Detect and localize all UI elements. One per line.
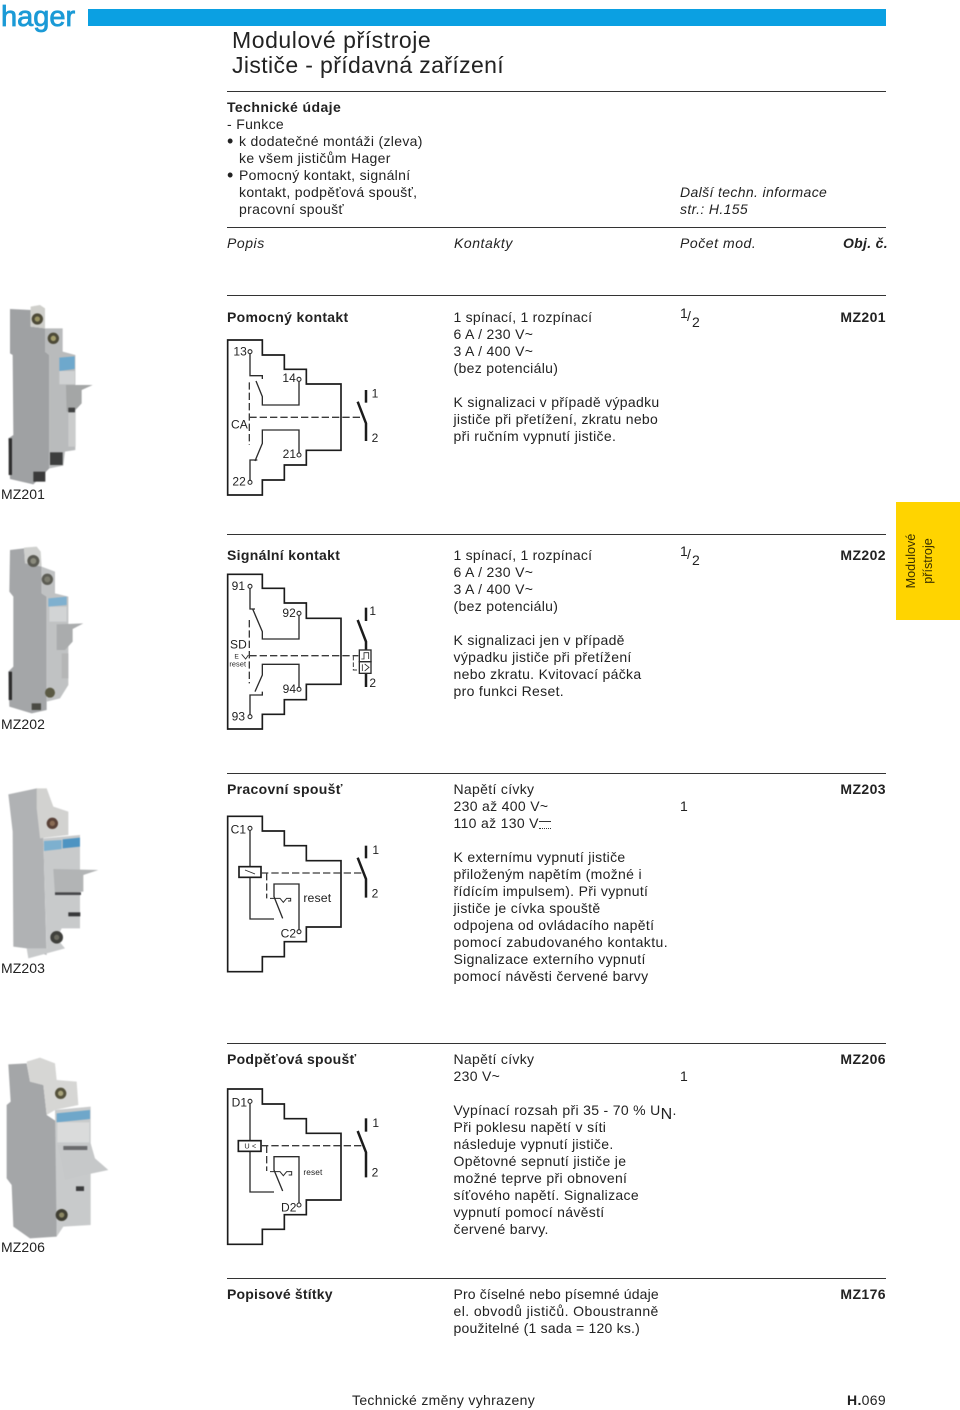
description: MZ206: síťového napětí. Signalizace [454,1187,639,1203]
photo: MZ202 device [8,546,83,714]
description: MZ202 [454,547,642,699]
heading: Podpěťová spoušť: Podpěťová spoušť [227,1051,356,1067]
heading: Popisové štítky: Popisové štítky [227,1286,333,1302]
panel: MZ202 [1,534,886,732]
description: MZ206: Vypínací rozsah při 35 - 70 % UN. [454,1102,677,1123]
description: MZ201 [453,309,660,444]
caption: MZ203: MZ203 [1,960,45,976]
description: MZ202: výpadku jističe při přetížení [454,649,632,665]
circuit diagram: MZ202: 1 [369,604,376,618]
heading: Signální kontakt: Signální kontakt [227,547,340,563]
circuit diagram: MZ201: 22 [232,475,246,489]
description: MZ202: (bez potenciálu) [454,598,558,614]
technical data text block [227,99,423,217]
description: MZ206: následuje vypnutí jističe. [454,1136,614,1152]
table header row: Počet mod. [680,235,756,251]
circuit diagram: MZ201 [226,339,379,496]
circuit diagram: MZ206: D2 [281,1200,297,1214]
circuit diagram: MZ202: 2 [369,676,376,690]
further information note: Další techn. informace [680,184,827,200]
technical data text block: pracovní spoušť [239,201,344,217]
circuit diagram: MZ206 [226,1088,379,1246]
modules count: 1/2: 1 [680,543,688,559]
table header row [227,235,888,251]
circuit diagram: MZ202: SD [230,638,247,652]
modules count: 1/2: 2 [692,314,700,330]
description: MZ203: pomocí zabudovaného kontaktu. [454,934,668,950]
description: MZ206: 230 V~ [454,1068,500,1084]
description: MZ202: K signalizaci jen v případě [454,632,625,648]
technical data text block: • [227,165,233,185]
description: MZ201: při ručním vypnutí jističe. [454,428,616,444]
description: MZ203: 230 až 400 V~ [454,798,548,814]
table header row: Popis [227,235,265,251]
description: MZ202: nebo zkratu. Kvitovací páčka [454,666,641,682]
modules count: 1/2: 1 [680,305,688,321]
circuit diagram: MZ202: reset [229,660,246,669]
description: MZ203: odpojena od ovládacího napětí [454,917,654,933]
modules count: 1/2: / [687,308,691,324]
description: MZ203: K externímu vypnutí jističe [454,849,626,865]
modules count: 1: 1 [680,798,688,814]
technical data text block: Pomocný kontakt, signální [239,167,410,183]
description: MZ203: pomocí návěsti červené barvy [454,968,648,984]
title: Modulové přístroje [232,27,431,53]
description: MZ202: 3 A / 400 V~ [454,581,533,597]
modules count: 1: 1 [680,1068,688,1084]
description: MZ203: přiloženým napětím (možné i [454,866,642,882]
heading: Pomocný kontakt: Pomocný kontakt [227,309,348,325]
modules count: 1/2: / [687,546,691,562]
circuit diagram: MZ206: 1 [372,1116,379,1130]
circuit diagram: MZ203: C2 [281,927,296,941]
description: MZ201: (bez potenciálu) [454,360,558,376]
description: MZ176: el. obvodů jističů. Oboustranně [454,1303,659,1319]
circuit diagram: MZ202: 94 [283,682,296,696]
photo: MZ201 device [8,304,92,485]
circuit diagram: MZ202: 91 [232,579,245,593]
photo: MZ203 device [8,788,98,958]
circuit diagram: MZ203: reset [303,891,332,905]
description: MZ201: 6 A / 230 V~ [454,326,533,342]
technical data text block: ke všem jističům Hager [239,150,391,166]
description: MZ202: 1 spínací, 1 rozpínací [454,547,592,563]
photo: MZ206 device [6,1058,108,1239]
technical data text block: kontakt, podpěťová spoušť, [239,184,417,200]
circuit diagram: MZ202: 93 [232,710,245,724]
order code: MZ206: MZ206 [840,1051,886,1067]
side tab: Modulové přístroje: přístroje [921,538,935,584]
circuit diagram: MZ202 [226,574,376,730]
circuit diagram: MZ203 [226,816,379,972]
description: MZ176 [454,1286,659,1336]
description: MZ206: červené barvy. [454,1221,549,1237]
circuit diagram: MZ201: 1 [372,386,379,400]
circuit diagram: MZ201: CA [231,417,248,431]
circuit diagram: MZ203: 1 [372,843,379,857]
panel: MZ201 [1,295,886,502]
circuit diagram: MZ202: E [234,654,239,661]
description: MZ203: jističe je cívka spouště [454,900,600,916]
description: MZ203 [453,781,668,984]
circuit diagram: MZ201: 13 [233,344,247,358]
logo: hager: hager [1,1,75,33]
modules count: 1/2: 2 [692,552,700,568]
circuit diagram: MZ203: 2 [372,886,379,900]
panel: MZ176 [227,1278,886,1336]
description: MZ203: řídícím impulsem). Při vypnutí [454,883,648,899]
further information note [680,184,827,217]
order code: MZ201: MZ201 [840,309,886,325]
order code: MZ176: MZ176 [840,1286,886,1302]
table header row: Kontakty [454,235,513,251]
circuit diagram: MZ203: C1 [231,822,246,836]
description: MZ201: 3 A / 400 V~ [454,343,533,359]
description: MZ203: Signalizace externího vypnutí [454,951,646,967]
description: MZ203: Napětí cívky [454,781,534,797]
technical data text block: - Funkce [227,116,284,132]
technical data text block: k dodatečné montáži (zleva) [239,133,423,149]
description: MZ206: Opětovné sepnutí jističe je [454,1153,626,1169]
description: MZ176: použitelné (1 sada = 120 ks.) [454,1320,640,1336]
circuit diagram: MZ202: 92 [282,606,296,620]
title: Jističe - přídavná zařízení [232,52,504,78]
modules count: 1/2 [680,305,700,330]
circuit diagram: MZ206: U < [244,1142,256,1151]
modules count: 1/2 [680,543,700,568]
technical data text block: Technické údaje [227,99,341,115]
circuit diagram: MZ206: reset [303,1167,323,1177]
technical data text block: • [227,131,233,151]
description: MZ201: K signalizaci v případě výpadku [454,394,660,410]
circuit diagram: MZ201: 2 [372,431,379,445]
further information note: str.: H.155 [680,201,748,217]
description: MZ201: 1 spínací, 1 rozpínací [454,309,592,325]
panel: MZ203 [1,773,886,984]
caption: MZ201: MZ201 [1,486,45,502]
description: MZ206: možné teprve při obnovení [454,1170,627,1186]
description: MZ206 [454,1051,677,1237]
description: MZ206: Při poklesu napětí v síti [454,1119,606,1135]
description: MZ202: 6 A / 230 V~ [454,564,533,580]
heading: Pracovní spoušť: Pracovní spoušť [227,781,343,797]
title [232,27,504,78]
circuit diagram: MZ206: 2 [372,1166,379,1180]
table header row: Obj. č. [843,235,888,251]
caption: MZ202: MZ202 [1,716,45,732]
circuit diagram: MZ206: D1 [232,1096,247,1110]
description: MZ206: Napětí cívky [454,1051,534,1067]
circuit diagram: MZ201: 14 [282,371,296,385]
side tab: Modulové přístroje [896,502,960,620]
panel: MZ206 [1,1043,886,1255]
footer note: Technické změny vyhrazeny [352,1392,535,1408]
description: MZ201: jističe při přetížení, zkratu nebo [454,411,658,427]
order code: MZ203: MZ203 [840,781,886,797]
circuit diagram: MZ201: 21 [283,447,296,461]
side tab: Modulové přístroje: Modulové [904,534,918,588]
description: MZ202: pro funkci Reset. [454,683,564,699]
description: MZ203: 110 až 130 V [454,815,539,831]
caption: MZ206: MZ206 [1,1239,45,1255]
page number: H.069 [847,1392,886,1408]
description: MZ206: vypnutí pomocí návěstí [454,1204,605,1220]
order code: MZ202: MZ202 [840,547,886,563]
description: MZ176: Pro číselné nebo písemné údaje [454,1286,659,1302]
header bar [88,9,886,26]
